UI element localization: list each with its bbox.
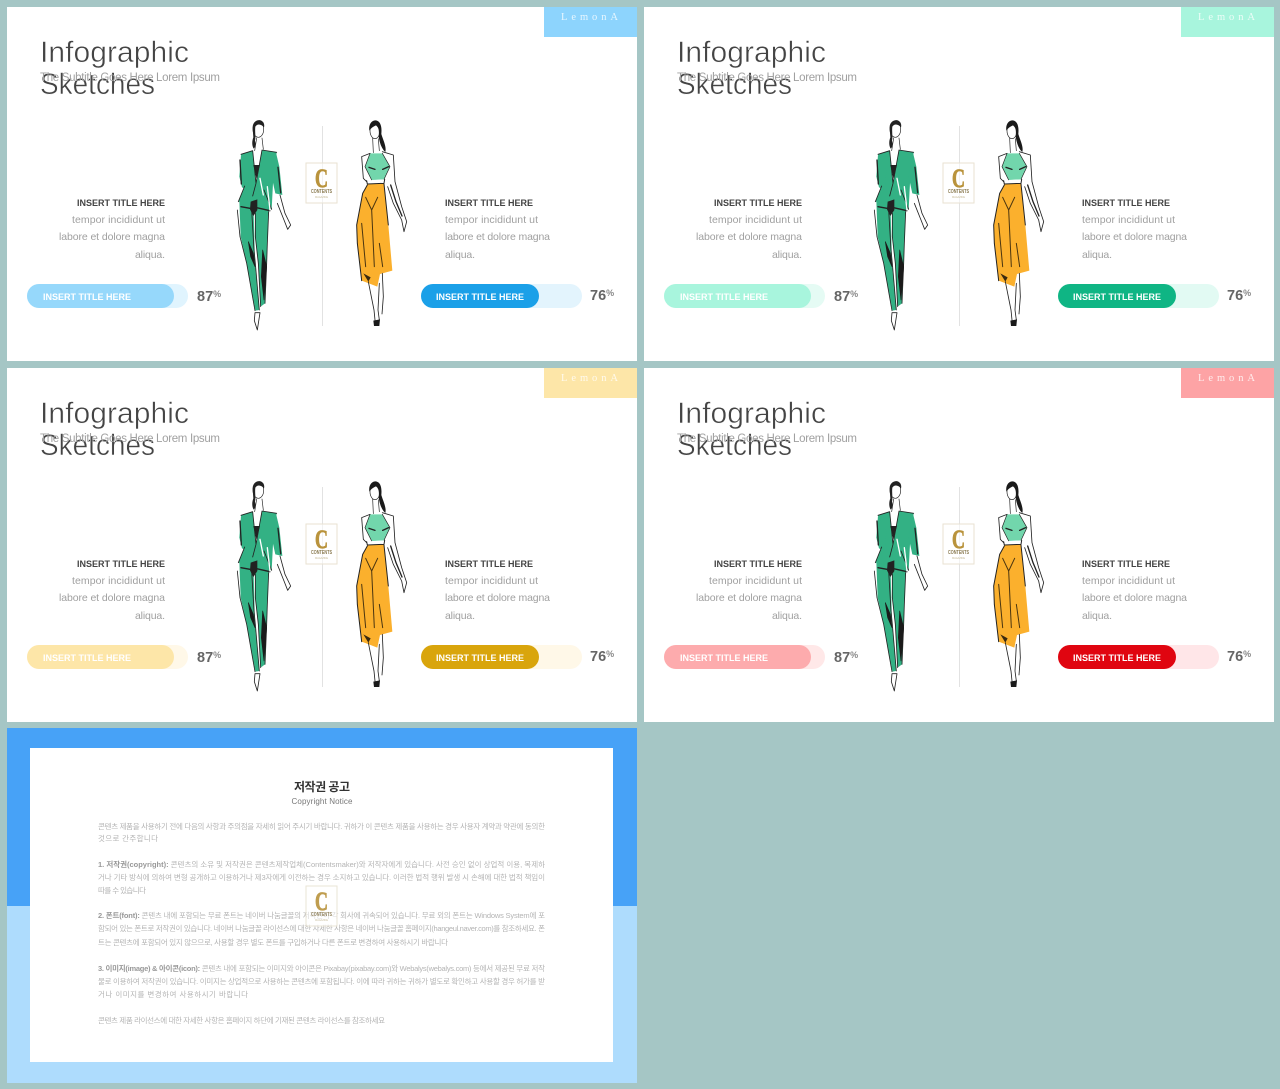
right progress bar [421,284,582,308]
font paragraph: 2. 폰트(font): 콘텐츠 내에 포함되는 무료 폰트는 네이버 나눔글꼴의 저작권이 각 회사에 귀속되어 있습니다. 무료 외의 폰트는 Windows System에 포 [98,910,545,920]
left percent: % [850,650,858,660]
logo [943,163,974,203]
logo [306,163,337,203]
left text block: aliqua. [135,249,165,261]
left progress bar: INSERT TITLE HERE [680,653,768,664]
right text block [1082,559,1187,622]
left text block: tempor incididunt ut [72,575,165,587]
left progress bar [664,284,825,308]
notice heading: 저작권 공고 [294,779,350,794]
title: Infographic [677,36,826,69]
title: Sketches [677,429,792,462]
right text block: labore et dolore magna [1082,231,1187,243]
font paragraph [98,910,545,947]
title: Sketches [40,429,155,462]
right percent: % [606,649,614,659]
image paragraph [98,963,545,999]
left percent: % [213,650,221,660]
logo [306,524,337,564]
subtitle: The Subtitle Goes Here Lorem Ipsum [40,433,220,445]
right text block: tempor incididunt ut [445,214,538,226]
right text block: tempor incididunt ut [1082,575,1175,587]
fashion figures [237,120,407,330]
left progress bar: INSERT TITLE HERE [43,653,131,664]
corner tab: LemonA [561,373,618,384]
corner tab [544,368,637,398]
right text block: labore et dolore magna [1082,592,1187,604]
right progress bar [1058,645,1219,669]
title: Infographic [40,36,189,69]
slide 4: red [644,368,1274,722]
left percent: 87 [834,289,850,305]
right percent: % [1243,649,1251,659]
left percent: % [850,289,858,299]
left text block: labore et dolore magna [59,592,165,604]
right progress bar: INSERT TITLE HERE [1073,292,1161,303]
left text block: tempor incididunt ut [72,214,165,226]
image paragraph: 물로 이용하여 저작권이 있습니다. 이미지는 상업적으로 사용하는 콘텐츠에 포함됩니다. 이에 따라 귀하는 귀하가 별도로 확인하고 사용할 경우 허가를 받 [98,976,545,986]
closing line: 콘텐츠 제품 라이선스에 대한 자세한 사항은 홈페이지 하단에 기재된 콘텐츠 라이선스를 참조하세요 [98,1015,385,1025]
right text block: aliqua. [1082,249,1112,261]
title: Sketches [677,68,792,101]
copyright paragraph: 따를 수 있습니다 [98,886,146,895]
title [40,397,189,462]
left percent: 87 [197,289,213,305]
left text block [696,559,802,622]
title [677,397,826,462]
copyright paragraph: 1. 저작권(copyright): 콘텐츠의 소유 및 저작권은 콘텐츠제작업체(Contentsmaker)와 저작자에게 있습니다. 사전 승인 없이 상업적 이용, 복제하 [98,859,545,869]
right percent: 76 [590,288,606,304]
logo watermark [306,886,337,926]
slide 5: copyright notice [7,728,637,1083]
corner tab: LemonA [1198,12,1255,23]
left text block: aliqua. [772,610,802,622]
fashion figures [874,481,1044,691]
right progress bar: INSERT TITLE HERE [436,653,524,664]
left percent: 87 [197,650,213,666]
subtitle: The Subtitle Goes Here Lorem Ipsum [677,433,857,445]
slide 3: yellow [7,368,637,722]
right percent: % [1243,288,1251,298]
right text block: INSERT TITLE HERE [1082,198,1170,209]
notice subheading: Copyright Notice [292,797,353,806]
intro paragraph: 것으로 간주합니다 [98,833,158,843]
left text block: INSERT TITLE HERE [77,198,165,209]
left progress bar [27,284,188,308]
right percent: % [606,288,614,298]
corner tab [1181,7,1274,37]
font paragraph: 트는 콘텐츠에 포함되어 있지 않으므로, 사용할 경우 별도 폰트를 구입하거나 다른 폰트로 변경하여 사용하시기 바랍니다 [98,937,448,947]
right text block: labore et dolore magna [445,231,550,243]
slide 1: blue [7,7,637,361]
corner tab [1181,368,1274,398]
left text block: INSERT TITLE HERE [714,559,802,570]
right text block: INSERT TITLE HERE [445,559,533,570]
left text block [696,198,802,261]
left text block: aliqua. [135,610,165,622]
subtitle: The Subtitle Goes Here Lorem Ipsum [677,72,857,84]
left text block: labore et dolore magna [59,231,165,243]
slide 2: mint [644,7,1274,361]
left percent: % [213,289,221,299]
left text block: tempor incididunt ut [709,575,802,587]
font paragraph: 함되어 있는 폰트로 저작권이 있습니다. 네이버 나눔글꼴 라이선스에 대한 자세한 사항은 네이버 나눔글꼴 홈페이지(hangeul.naver.com)를 참조하세요. 폰 [98,923,545,933]
right progress bar: INSERT TITLE HERE [1073,653,1161,664]
copyright paragraph [98,859,545,895]
right progress bar [421,645,582,669]
title [40,36,189,101]
right text block: tempor incididunt ut [1082,214,1175,226]
left text block: labore et dolore magna [696,592,802,604]
right percent: 76 [1227,649,1243,665]
left progress bar [27,645,188,669]
right text block: aliqua. [1082,610,1112,622]
left text block [59,198,165,261]
corner tab [544,7,637,37]
corner tab: LemonA [1198,373,1255,384]
title [677,36,826,101]
right text block: INSERT TITLE HERE [1082,559,1170,570]
left progress bar: INSERT TITLE HERE [680,292,768,303]
right percent: 76 [590,649,606,665]
right progress bar [1058,284,1219,308]
left percent: 87 [834,650,850,666]
right text block [445,198,550,261]
right text block: INSERT TITLE HERE [445,198,533,209]
intro paragraph [98,821,545,843]
left text block [59,559,165,622]
right text block [445,559,550,622]
fashion figures [237,481,407,691]
intro paragraph: 콘텐츠 제품을 사용하기 전에 다음의 사항과 주의점을 자세히 읽어 주시기 바랍니다. 귀하가 이 콘텐츠 제품을 사용하는 경우 사용자 계약과 약관에 동의한 [98,821,545,831]
title: Infographic [677,397,826,430]
left text block: aliqua. [772,249,802,261]
left text block: tempor incididunt ut [709,214,802,226]
image paragraph: 3. 이미지(image) & 아이콘(icon): 콘텐츠 내에 포함되는 이미지와 아이콘은 Pixabay(pixabay.com)와 Webalys(webalys.com) 등에서 제공된 무료 저작 [98,963,545,973]
subtitle: The Subtitle Goes Here Lorem Ipsum [40,72,220,84]
title: Sketches [40,68,155,101]
title: Infographic [40,397,189,430]
right text block [1082,198,1187,261]
right text block: labore et dolore magna [445,592,550,604]
corner tab: LemonA [561,12,618,23]
right percent: 76 [1227,288,1243,304]
logo [943,524,974,564]
left progress bar: INSERT TITLE HERE [43,292,131,303]
right progress bar: INSERT TITLE HERE [436,292,524,303]
right text block: tempor incididunt ut [445,575,538,587]
right text block: aliqua. [445,610,475,622]
fashion figures [874,120,1044,330]
left text block: labore et dolore magna [696,231,802,243]
left progress bar [664,645,825,669]
left text block: INSERT TITLE HERE [77,559,165,570]
left text block: INSERT TITLE HERE [714,198,802,209]
right text block: aliqua. [445,249,475,261]
image paragraph: 거나 이미지를 변경하여 사용하시기 바랍니다 [98,989,248,999]
copyright paragraph: 거나 기타 방식에 의하여 변형 공개하고 이용하거나 제3자에게 이전하는 경우 소지하고 있습니다. 이러한 법적 행위 발생 시 손해에 대한 법적 책임이 [98,872,545,882]
